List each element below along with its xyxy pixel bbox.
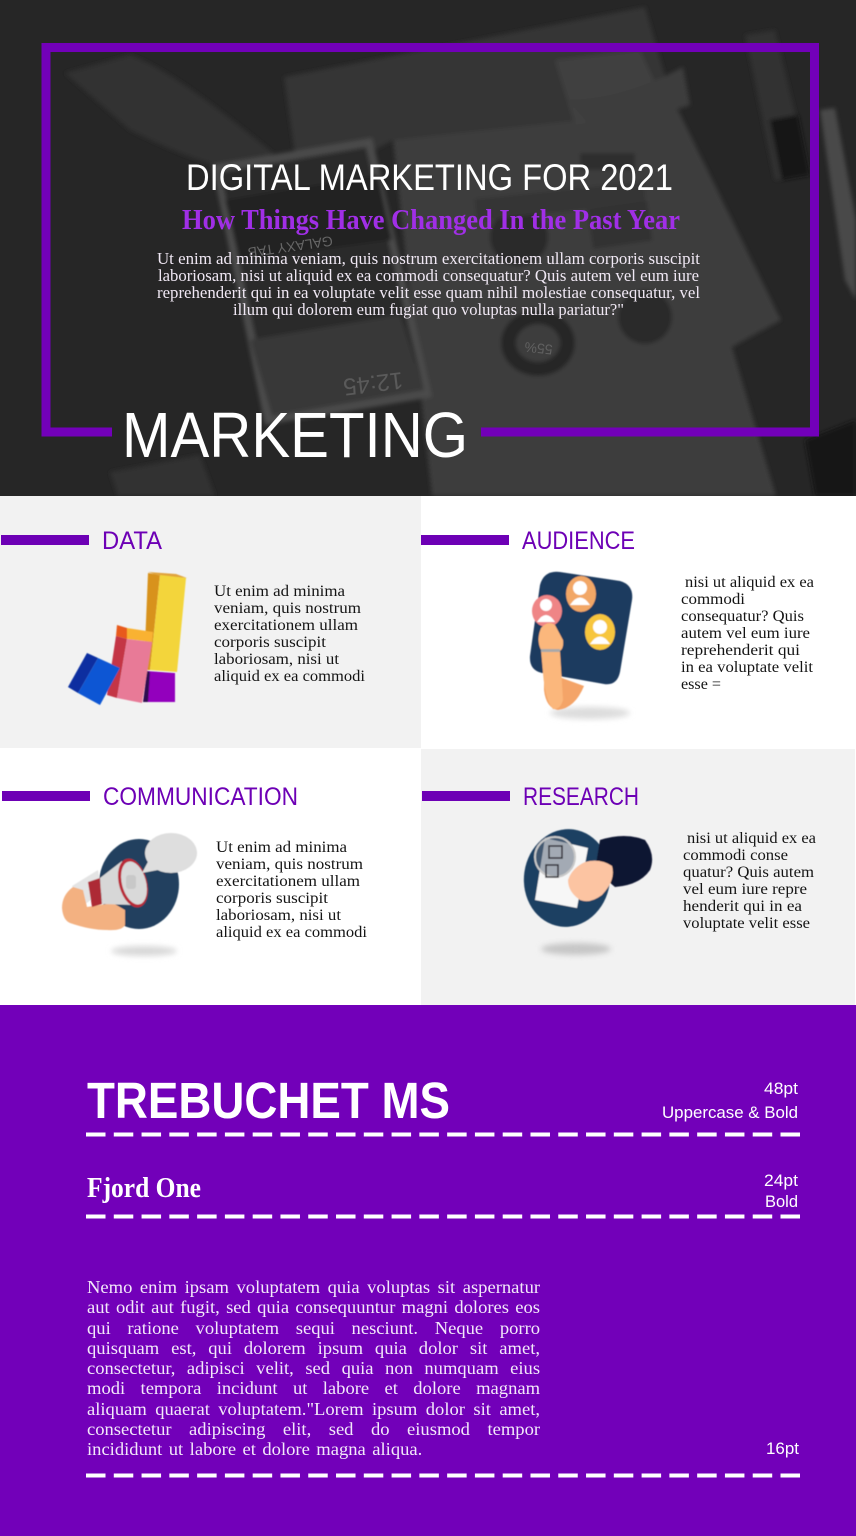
heading: communication: COMMUNICATION (103, 783, 298, 811)
text: data: Ut enim ad minima (214, 583, 345, 600)
text: communication (216, 839, 368, 941)
body font sample paragraph: modi tempora incidunt ut labore et dolore magnam (87, 1378, 540, 1398)
intro paragraph (157, 249, 700, 319)
panel: communication (0, 749, 421, 1005)
text: communication: Ut enim ad minima (216, 839, 347, 856)
text: data (214, 583, 366, 685)
hero background photo: 55% (524, 339, 553, 358)
purple title frame (46, 48, 814, 432)
heading: audience: AUDIENCE (522, 527, 635, 555)
text: data: corporis suscipit (214, 634, 327, 651)
panel: audience (421, 496, 856, 749)
text: audience (681, 574, 814, 693)
intro paragraph: Ut enim ad minima veniam, quis nostrum exercitationem ullam corporis suscipit (157, 249, 700, 268)
body font sample paragraph (87, 1277, 540, 1459)
text: audience: reprehenderit qui (681, 642, 801, 659)
title: DIGITAL MARKETING FOR 2021 (186, 157, 673, 198)
heading font spec (662, 1079, 798, 1122)
body font sample paragraph: aliquam quaerat voluptatem."Lorem ipsum dolor sit amet, (87, 1399, 540, 1419)
text: communication: exercitationem ullam (216, 873, 361, 890)
text: research (683, 830, 816, 932)
text: audience: autem vel eum iure (681, 625, 810, 642)
subheading font spec: Bold (765, 1192, 798, 1211)
intro paragraph: illum qui dolorem eum fugiat quo voluptas nulla pariatur?" (233, 300, 624, 319)
body font sample paragraph: incididunt ut labore et dolore magna aliqua. (87, 1439, 422, 1459)
text: audience: nisi ut aliquid ex ea (685, 574, 814, 591)
subtitle: How Things Have Changed In the Past Year (182, 205, 680, 236)
text: research: commodi conse (683, 847, 788, 864)
subheading font spec: 24pt (764, 1171, 798, 1190)
icon: hand tapping audience profiles (530, 572, 632, 719)
text: audience: commodi (681, 591, 746, 608)
text: audience: in ea voluptate velit (681, 659, 814, 676)
text: data: veniam, quis nostrum (214, 600, 362, 617)
hero background photo (0, 0, 856, 496)
heading: research: RESEARCH (523, 783, 639, 811)
body font sample paragraph: Nemo enim ipsam voluptatem quia voluptas sit aspernatur (87, 1277, 540, 1297)
text: research: quatur? Quis autem (683, 864, 815, 881)
hero background photo: GALAXY TAB (247, 233, 334, 261)
panel: data (0, 496, 421, 748)
icon: 3D bar blocks (68, 572, 187, 705)
panel: research (421, 749, 855, 1005)
text: data: laboriosam, nisi ut (214, 651, 340, 668)
heading font sample: TREBUCHET MS (87, 1072, 450, 1129)
text: audience: consequatur? Quis (681, 608, 804, 625)
heading: data: DATA (102, 527, 162, 555)
text: research: vel eum iure repre (683, 881, 807, 898)
body font sample paragraph: aut odit aut fugit, sed quia consequuntur magni dolores eos (87, 1297, 540, 1317)
hero background photo: 12:45 (342, 366, 405, 400)
body font spec: 16pt (766, 1439, 799, 1458)
panel: typography guide (0, 1005, 856, 1536)
subheading font sample: Fjord One (87, 1172, 201, 1204)
text: communication: corporis suscipit (216, 890, 329, 907)
body font sample paragraph: qui ratione voluptatem sequi nesciunt. Neque porro (87, 1318, 540, 1338)
text: research: henderit qui in ea (683, 898, 802, 915)
text: research: nisi ut aliquid ex ea (687, 830, 816, 847)
icon: hand with magnifier over document (518, 823, 652, 955)
text: data: exercitationem ullam (214, 617, 359, 634)
icon: megaphone with speech bubble (62, 833, 197, 956)
heading font spec: Uppercase & Bold (662, 1103, 798, 1122)
text: communication: laboriosam, nisi ut (216, 907, 342, 924)
text: research: voluptate velit esse (683, 915, 810, 932)
text: audience: esse = (681, 676, 721, 693)
text: communication: veniam, quis nostrum (216, 856, 364, 873)
body font sample paragraph: consectetur adipiscing elit, sed do eiusmod tempor (87, 1419, 540, 1439)
body font sample paragraph: quisquam est, qui dolorem ipsum quia dolor sit amet, (87, 1338, 540, 1358)
MARKETING heading: MARKETING (122, 399, 468, 471)
intro paragraph: reprehenderit qui in ea voluptate velit esse quam nihil molestiae consequatur, vel (157, 283, 700, 302)
intro paragraph: laboriosam, nisi ut aliquid ex ea commodi consequatur? Quis autem vel eum iure (158, 266, 699, 285)
heading font spec: 48pt (764, 1079, 798, 1098)
body font sample paragraph: consectetur, adipisci velit, sed quia non numquam eius (87, 1358, 540, 1378)
subheading font spec (764, 1171, 798, 1211)
text: communication: aliquid ex ea commodi (216, 924, 368, 941)
text: data: aliquid ex ea commodi (214, 668, 366, 685)
